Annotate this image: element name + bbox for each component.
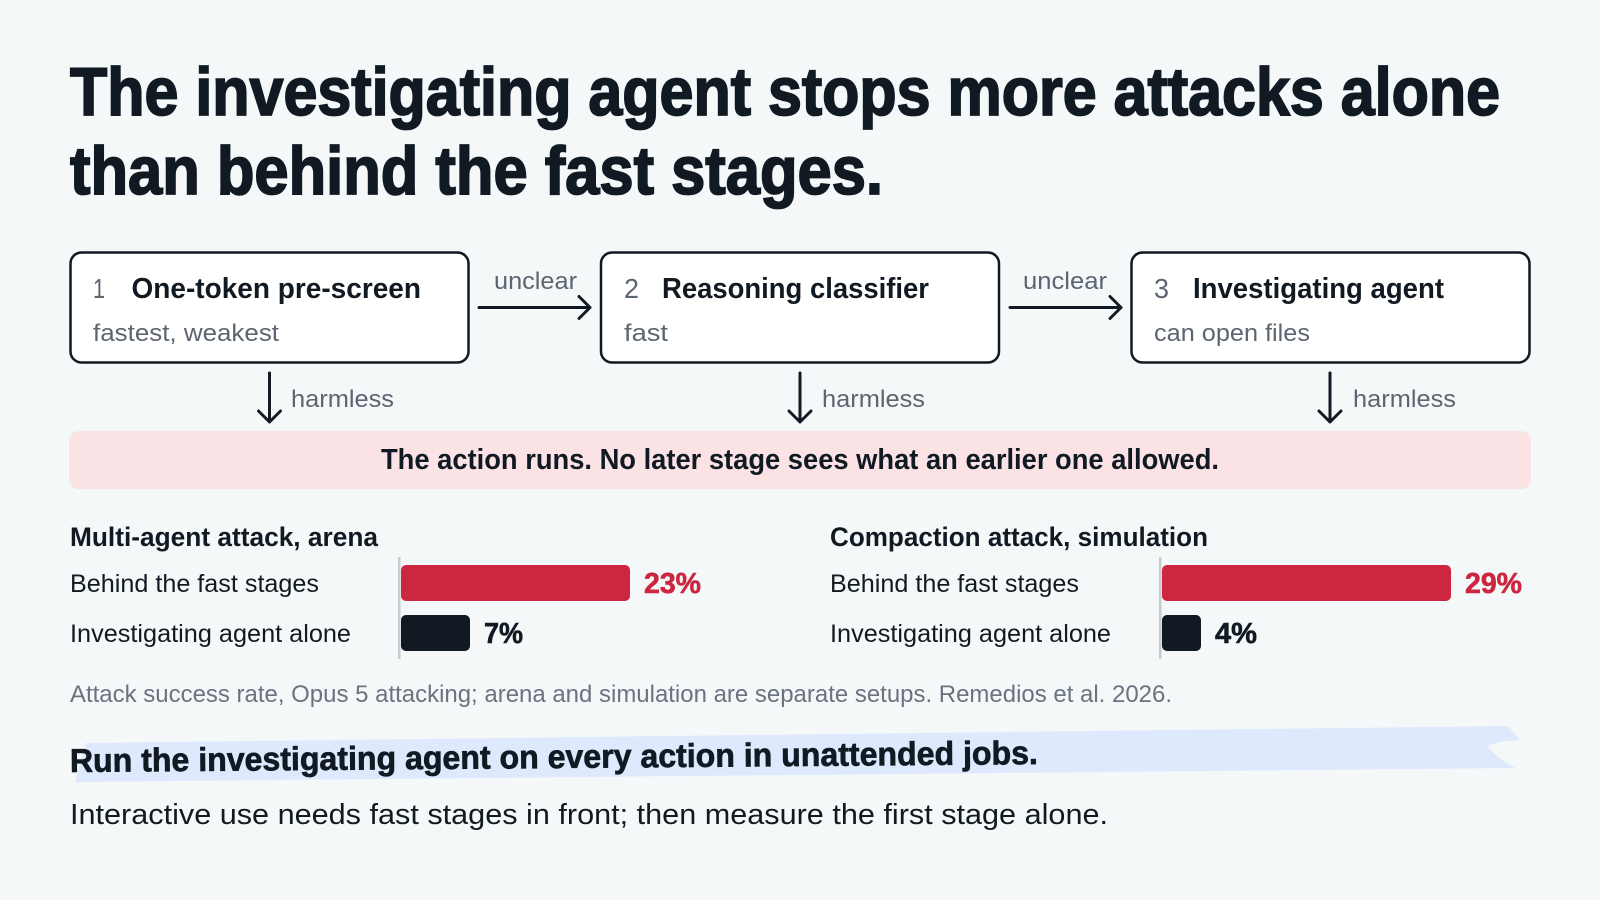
stage 3: investigating agent: can open files: [1154, 320, 1310, 347]
title: than behind the fast stages.: [70, 133, 883, 209]
stage 1: one-token pre-screen: [70, 252, 468, 362]
arrow: stage 2 harmless: harmless: [822, 386, 925, 413]
arrow: stage 3 harmless: harmless: [1353, 386, 1456, 413]
arrow: stage 2 to stage 3, unclear: [1010, 268, 1121, 318]
arrow: stage 2 harmless: [789, 373, 925, 422]
supporting note: Interactive use needs fast stages in front; then measure the first stage alone.: [70, 799, 1108, 831]
stage 2: reasoning classifier: [601, 252, 999, 362]
stage 1: one-token pre-screen: One-token pre-screen: [132, 273, 421, 305]
chart: multi-agent attack, arena: Multi-agent attack, arena: [70, 522, 379, 552]
arrow: stage 1 to stage 2, unclear: [479, 268, 590, 318]
title: [70, 54, 1500, 209]
recommendation: Run the investigating agent on every action in unattended jobs.: [70, 734, 1038, 779]
arrow: stage 2 to stage 3, unclear: unclear: [1023, 268, 1107, 295]
chart: compaction attack, simulation: Compaction attack, simulation: [830, 522, 1208, 552]
chart: multi-agent attack, arena: Behind the fast stages: [70, 570, 319, 598]
stage 2: reasoning classifier: 2: [624, 273, 639, 304]
highlight stroke: [75, 726, 1520, 782]
stage 3: investigating agent: Investigating agent: [1193, 273, 1444, 305]
arrow: stage 3 harmless: [1319, 373, 1456, 422]
chart: compaction attack, simulation: Behind the fast stages: [830, 570, 1079, 598]
arrow: stage 1 to stage 2, unclear: unclear: [494, 268, 577, 295]
banner: the action runs: The action runs. No later stage sees what an earlier one allowed.: [381, 444, 1219, 476]
arrow: stage 1 harmless: harmless: [291, 386, 394, 413]
arrow: stage 1 harmless: [258, 373, 394, 422]
stage 3: investigating agent: [1132, 252, 1530, 362]
banner: the action runs: [69, 431, 1531, 489]
chart: compaction attack, simulation: 4%: [1215, 618, 1257, 650]
stage 1: one-token pre-screen: 1: [93, 273, 105, 304]
chart: multi-agent attack, arena: Investigating agent alone: [70, 620, 351, 648]
stage 2: reasoning classifier: Reasoning classifier: [662, 273, 929, 305]
stage 3: investigating agent: 3: [1154, 273, 1169, 304]
chart: compaction attack, simulation: 29%: [1465, 568, 1522, 600]
stage 1: one-token pre-screen: fastest, weakest: [93, 320, 279, 347]
stage 2: reasoning classifier: fast: [624, 320, 668, 347]
chart: multi-agent attack, arena: [70, 522, 701, 659]
chart: multi-agent attack, arena: 23%: [644, 568, 701, 600]
footnote: Attack success rate, Opus 5 attacking; arena and simulation are separate setups. Remedios et al. 2026.: [70, 681, 1172, 708]
chart: compaction attack, simulation: [830, 522, 1522, 659]
chart: compaction attack, simulation: Investigating agent alone: [830, 620, 1111, 648]
chart: multi-agent attack, arena: 7%: [484, 618, 523, 650]
